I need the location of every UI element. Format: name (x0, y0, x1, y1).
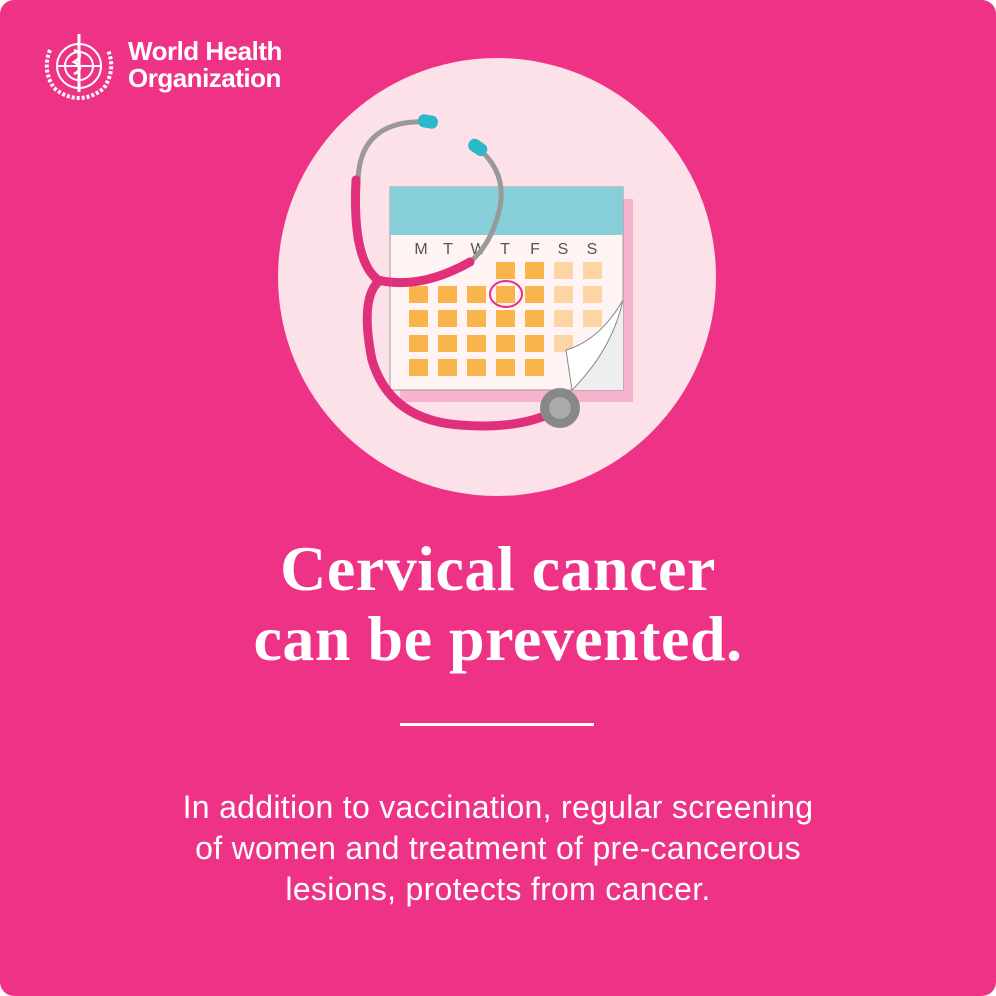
body text: of women and treatment of pre-cancerous (195, 830, 801, 866)
logo: WHO (44, 34, 282, 100)
calendar: T (500, 241, 510, 258)
calendar: M (414, 241, 428, 258)
title (253, 533, 743, 674)
body text: In addition to vaccination, regular screening (183, 789, 813, 825)
body text (183, 789, 813, 907)
calendar (390, 187, 633, 402)
icon: WHO emblem (44, 34, 114, 100)
divider (400, 723, 594, 726)
logo text: Organization (128, 63, 281, 93)
calendar: F (530, 241, 540, 258)
title: can be prevented. (253, 603, 743, 674)
stethoscope (355, 113, 580, 428)
body text: lesions, protects from cancer. (285, 871, 711, 907)
logo text: World Health (128, 36, 282, 66)
logo text (128, 36, 282, 93)
calendar: W (470, 241, 486, 258)
background circle (278, 58, 716, 496)
title: Cervical cancer (280, 533, 716, 604)
calendar: S (587, 241, 597, 258)
calendar: S (558, 241, 568, 258)
illustration: stethoscope and calendar (278, 58, 716, 496)
calendar: T (443, 241, 453, 258)
